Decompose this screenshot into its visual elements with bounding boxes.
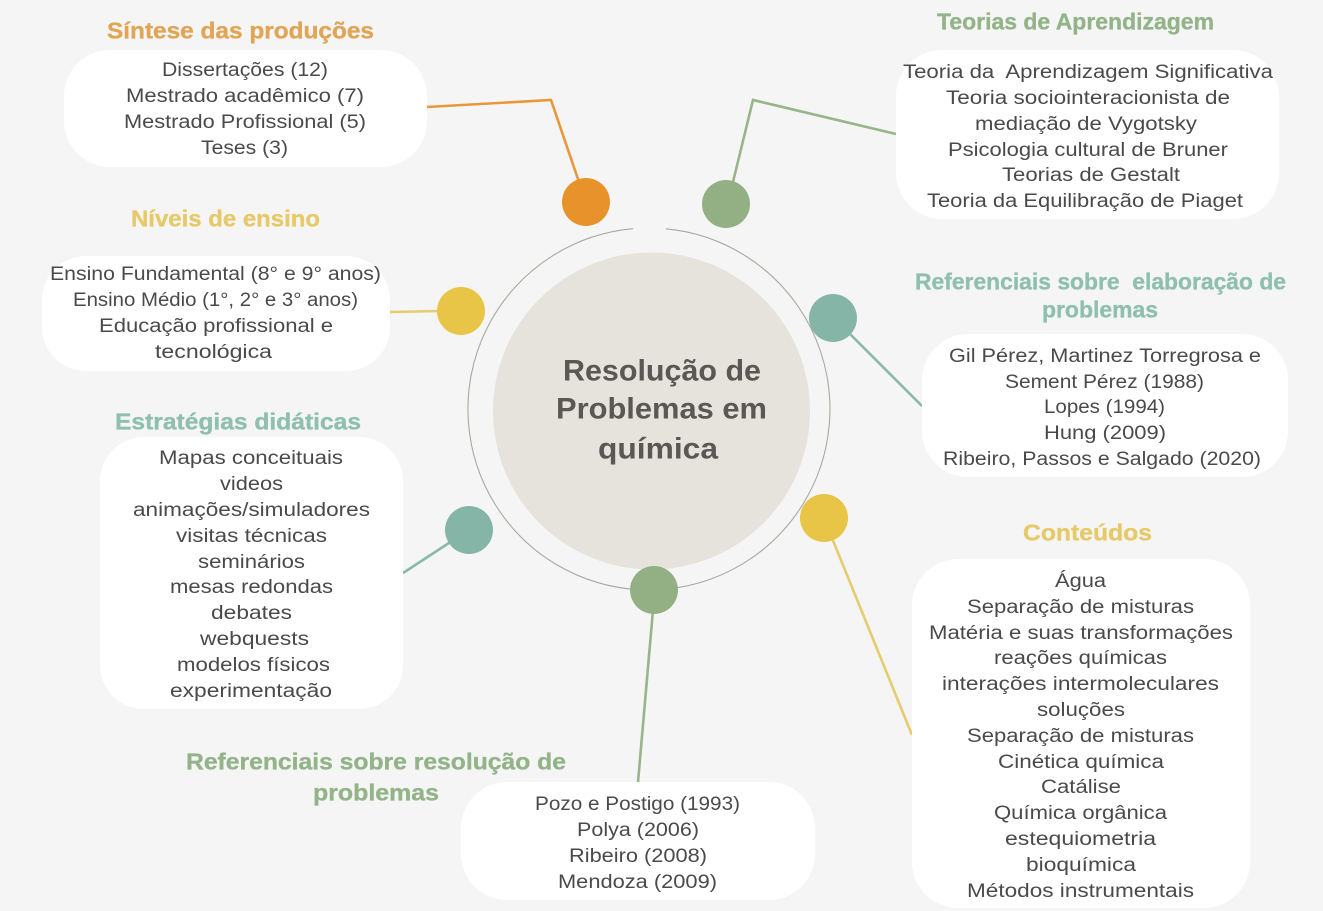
list: referenciais sobre elaboração: Lopes (1994) (1044, 397, 1165, 418)
list: conteúdos: Métodos instrumentais (967, 881, 1194, 902)
list: conteúdos: reações químicas (994, 648, 1167, 669)
list: conteúdos: Separação de misturas (967, 726, 1194, 747)
connector: conteúdos (832, 538, 912, 735)
list: estratégias didáticas: videos (220, 474, 283, 495)
central disc with title: química (598, 432, 718, 466)
node: green bottom (630, 566, 678, 614)
list: conteúdos: Água (1055, 571, 1106, 592)
list: referenciais sobre elaboração: Gil Pérez, Martinez Torregrosa e (949, 346, 1261, 367)
panel: níveis de ensino (42, 206, 390, 371)
list: teorias de aprendizagem: Teoria da Aprendizagem Significativa (903, 62, 1273, 83)
list: estratégias didáticas (133, 448, 370, 702)
card: conteúdos (912, 559, 1250, 908)
list: síntese das produções (124, 60, 366, 159)
list: conteúdos: Matéria e suas transformações (929, 623, 1233, 644)
list: referenciais sobre elaboração: Ribeiro, Passos e Salgado (2020) (943, 449, 1261, 470)
list: conteúdos: Cinética química (998, 752, 1165, 773)
list: referenciais sobre resolução: Ribeiro (2008) (569, 846, 707, 867)
list: conteúdos: soluções (1037, 700, 1125, 721)
list: referenciais sobre resolução: Pozo e Postigo (1993) (535, 794, 740, 815)
list: estratégias didáticas: mesas redondas (170, 577, 333, 598)
connector: referenciais sobre elaboração (848, 332, 922, 406)
list: níveis de ensino: Ensino Fundamental (8° e 9° anos) (50, 264, 381, 285)
central disc with title: Resolução de (563, 354, 761, 388)
list: estratégias didáticas: experimentação (170, 681, 332, 702)
list: estratégias didáticas: Mapas conceituais (159, 448, 343, 469)
connector: estratégias didáticas (403, 541, 452, 573)
central disc with title: Problemas em (556, 392, 767, 426)
list: conteúdos: Separação de misturas (967, 597, 1194, 618)
list: teorias de aprendizagem: Teoria da Equilibração de Piaget (927, 191, 1244, 212)
card: síntese das produções (64, 50, 427, 167)
list: níveis de ensino: Educação profissional e (99, 316, 333, 337)
list: conteúdos: estequiometria (1005, 829, 1157, 850)
panel: síntese das produções (64, 18, 427, 167)
list: referenciais sobre elaboração: Hung (2009) (1044, 423, 1166, 444)
heading: síntese das produções: Síntese das produções (107, 18, 374, 44)
card: teorias de aprendizagem (896, 50, 1279, 219)
list: síntese das produções: Teses (3) (201, 138, 288, 159)
list: estratégias didáticas: seminários (198, 552, 305, 573)
node: teal right (809, 294, 857, 342)
node: orange (562, 178, 610, 226)
heading: referenciais sobre resolução de problemas: problemas (313, 780, 439, 806)
heading: referenciais sobre elaboração de problemas: Referenciais sobre elaboração de (915, 268, 1286, 294)
list: estratégias didáticas: debates (211, 603, 292, 624)
list: conteúdos: interações intermoleculares (942, 674, 1219, 695)
list: referenciais sobre resolução: Polya (2006) (577, 820, 699, 841)
panel: estratégias didáticas (100, 408, 403, 709)
list: conteúdos: Catálise (1041, 777, 1121, 798)
list: referenciais sobre resolução (535, 794, 740, 893)
list: níveis de ensino (50, 264, 381, 363)
list: teorias de aprendizagem: Psicologia cultural de Bruner (948, 140, 1229, 161)
heading: conteúdos: Conteúdos (1023, 520, 1152, 546)
list: conteúdos: bioquímica (1026, 855, 1137, 876)
list: teorias de aprendizagem (903, 62, 1273, 212)
list: teorias de aprendizagem: Teorias de Gestalt (1002, 165, 1181, 186)
card: referenciais sobre resolução (461, 782, 815, 900)
heading: referenciais sobre resolução de problemas: Referenciais sobre resolução de (186, 748, 566, 774)
list: referenciais sobre resolução: Mendoza (2009) (558, 872, 717, 893)
list: referenciais sobre elaboração (943, 346, 1261, 470)
list: referenciais sobre elaboração: Sement Pérez (1988) (1005, 372, 1204, 393)
list: síntese das produções: Mestrado acadêmico (7) (126, 86, 364, 107)
outer ring (468, 229, 830, 590)
list: estratégias didáticas: modelos físicos (177, 655, 330, 676)
heading: estratégias didáticas: Estratégias didáticas (115, 408, 361, 434)
list: níveis de ensino: tecnológica (155, 342, 273, 363)
list: conteúdos (929, 571, 1233, 902)
node: yellow right (800, 494, 848, 542)
heading: níveis de ensino: Níveis de ensino (131, 206, 320, 232)
card: estratégias didáticas (100, 437, 403, 709)
list: síntese das produções: Dissertações (12) (162, 60, 328, 81)
list: estratégias didáticas: webquests (199, 629, 309, 650)
panel: conteúdos (912, 520, 1250, 908)
connector: síntese das produções (427, 100, 579, 182)
panel: teorias de aprendizagem (896, 8, 1279, 219)
connector: níveis de ensino (390, 311, 440, 312)
list: teorias de aprendizagem: Teoria sociointeracionista de (946, 88, 1230, 109)
connector: referenciais sobre resolução (638, 610, 653, 782)
panel: referenciais sobre elaboração de problemas (915, 268, 1288, 477)
node: yellow left (437, 287, 485, 335)
list: estratégias didáticas: visitas técnicas (176, 526, 327, 547)
list: teorias de aprendizagem: mediação de Vygotsky (975, 114, 1198, 135)
node: green top (702, 180, 750, 228)
connector: teorias de aprendizagem (732, 100, 896, 186)
heading: referenciais sobre elaboração de problemas: problemas (1042, 296, 1158, 322)
card: referenciais sobre elaboração (922, 334, 1288, 477)
list: níveis de ensino: Ensino Médio (1°, 2° e 3° anos) (73, 290, 358, 311)
panel: referenciais sobre resolução de problemas (186, 748, 815, 900)
card: níveis de ensino (42, 256, 390, 371)
heading: referenciais sobre elaboração de problemas (915, 268, 1286, 322)
node: teal left (445, 506, 493, 554)
heading: referenciais sobre resolução de problemas (186, 748, 566, 806)
list: estratégias didáticas: animações/simuladores (133, 500, 370, 521)
central disc with title (493, 252, 810, 570)
list: síntese das produções: Mestrado Profissional (5) (124, 112, 366, 133)
list: conteúdos: Química orgânica (994, 803, 1167, 824)
heading: teorias de aprendizagem: Teorias de Aprendizagem (937, 8, 1214, 34)
